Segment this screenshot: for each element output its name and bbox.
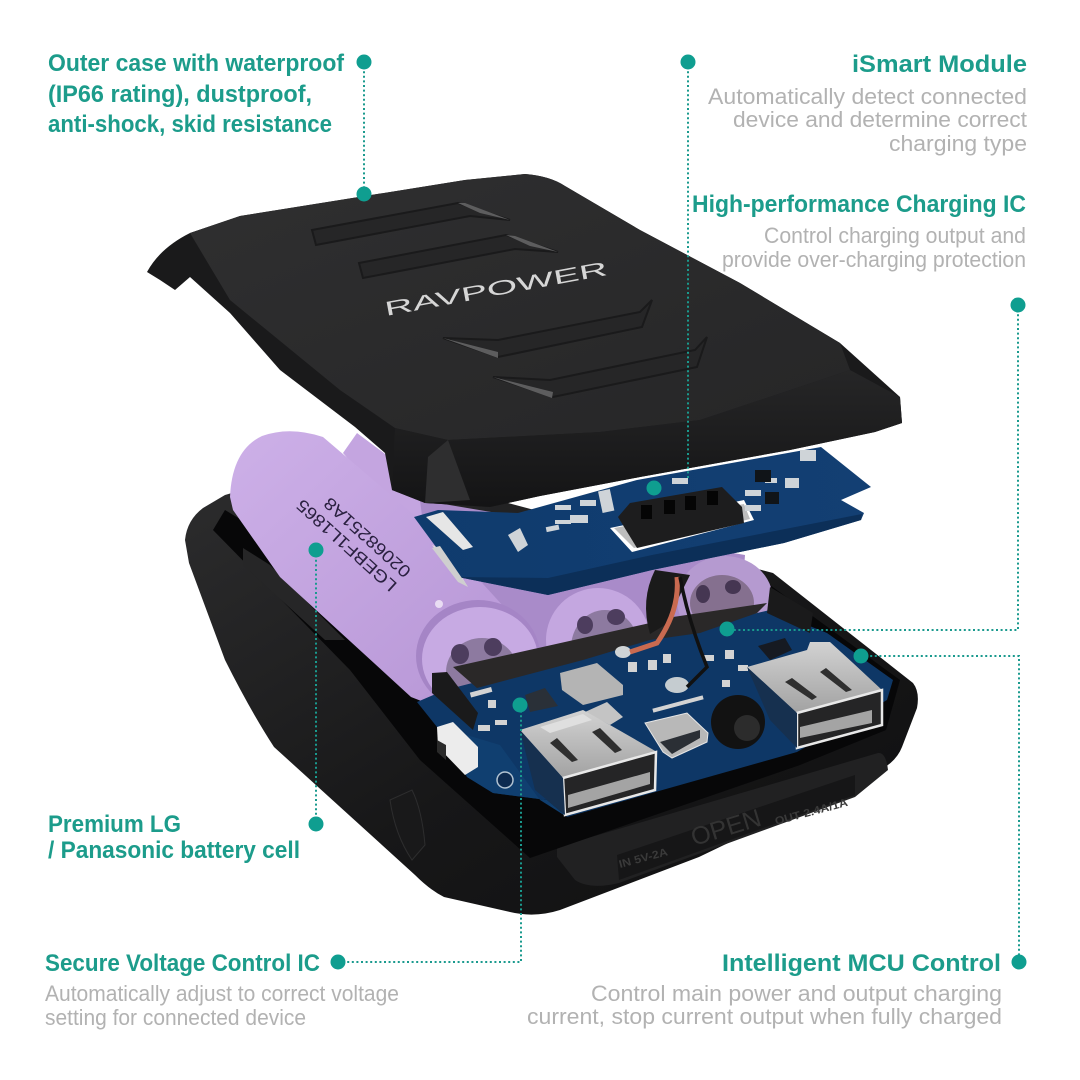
iSmart description: [708, 84, 1027, 156]
upper circuit board: [414, 447, 871, 595]
cell print: model: LGEBF1L1865: [293, 495, 401, 595]
battery cell: front: [230, 431, 540, 720]
MCU connector: [854, 648, 1026, 970]
callout: MCU: [527, 648, 1026, 1029]
iSmart connector: [646, 54, 696, 496]
charging IC description: [722, 223, 1026, 272]
callout: charging IC: [692, 191, 1026, 636]
iSmart description: device and determine correct: [733, 107, 1027, 132]
case label: input: IN 5V-2A: [618, 846, 669, 871]
MCU description: current, stop current output when fully charged: [527, 1004, 1002, 1029]
inductor: [560, 663, 623, 705]
callout: voltage IC: [45, 698, 528, 1030]
case label: output: OUT 2.4A/1A: [774, 797, 849, 828]
wires: [646, 570, 690, 634]
iSmart description: charging type: [889, 131, 1027, 156]
voltage connector: [330, 698, 528, 970]
callout: outer case: [48, 50, 372, 202]
charging IC description: provide over-charging protection: [722, 247, 1026, 272]
case label: OPEN: OPEN: [688, 804, 765, 852]
iSmart description: Automatically detect connected: [708, 84, 1027, 109]
charging IC connector: [720, 298, 1026, 636]
battery heading: / Panasonic battery cell: [48, 837, 300, 864]
outer case connector: [356, 54, 372, 202]
callout: iSmart: [646, 51, 1027, 496]
case front tab: [557, 753, 888, 886]
voltage description: setting for connected device: [45, 1005, 306, 1030]
dark connector bar: [453, 603, 767, 688]
lower circuit board: [417, 570, 893, 817]
iSmart heading: iSmart Module: [852, 51, 1027, 78]
outer case heading: [48, 50, 345, 138]
outer case heading: (IP66 rating), dustproof,: [48, 81, 312, 108]
USB port: left: [520, 710, 657, 815]
ICs: [525, 688, 558, 712]
MCU heading: Intelligent MCU Control: [722, 950, 1001, 977]
battery connector: [308, 542, 324, 832]
lid: outer case: [147, 174, 902, 507]
lid ridges: [312, 203, 707, 397]
lid logo: RAVPOWER: [383, 258, 609, 321]
power button: [390, 790, 425, 860]
battery cells: rear: [343, 433, 773, 692]
outer case heading: Outer case with waterproof: [48, 50, 345, 77]
voltage heading: Secure Voltage Control IC: [45, 950, 320, 977]
white side connector: [437, 722, 478, 775]
voltage description: Automatically adjust to correct voltage: [45, 981, 399, 1006]
dark barrel jack: [711, 695, 765, 749]
charging IC heading: High-performance Charging IC: [692, 191, 1026, 218]
device: lower case: [185, 460, 918, 915]
battery heading: Premium LG: [48, 811, 181, 838]
callout: battery: [48, 542, 324, 864]
MCU description: Control main power and output charging: [591, 981, 1002, 1006]
outer case heading: anti-shock, skid resistance: [48, 111, 332, 138]
charging IC description: Control charging output and: [764, 223, 1026, 248]
cell print: serial: 02068251A8: [320, 493, 415, 581]
MCU description: [527, 981, 1002, 1029]
voltage description: [45, 981, 399, 1030]
USB port: right: [747, 642, 882, 748]
micro USB port: [645, 713, 708, 758]
cavity: [213, 510, 900, 858]
battery heading: [48, 811, 300, 864]
